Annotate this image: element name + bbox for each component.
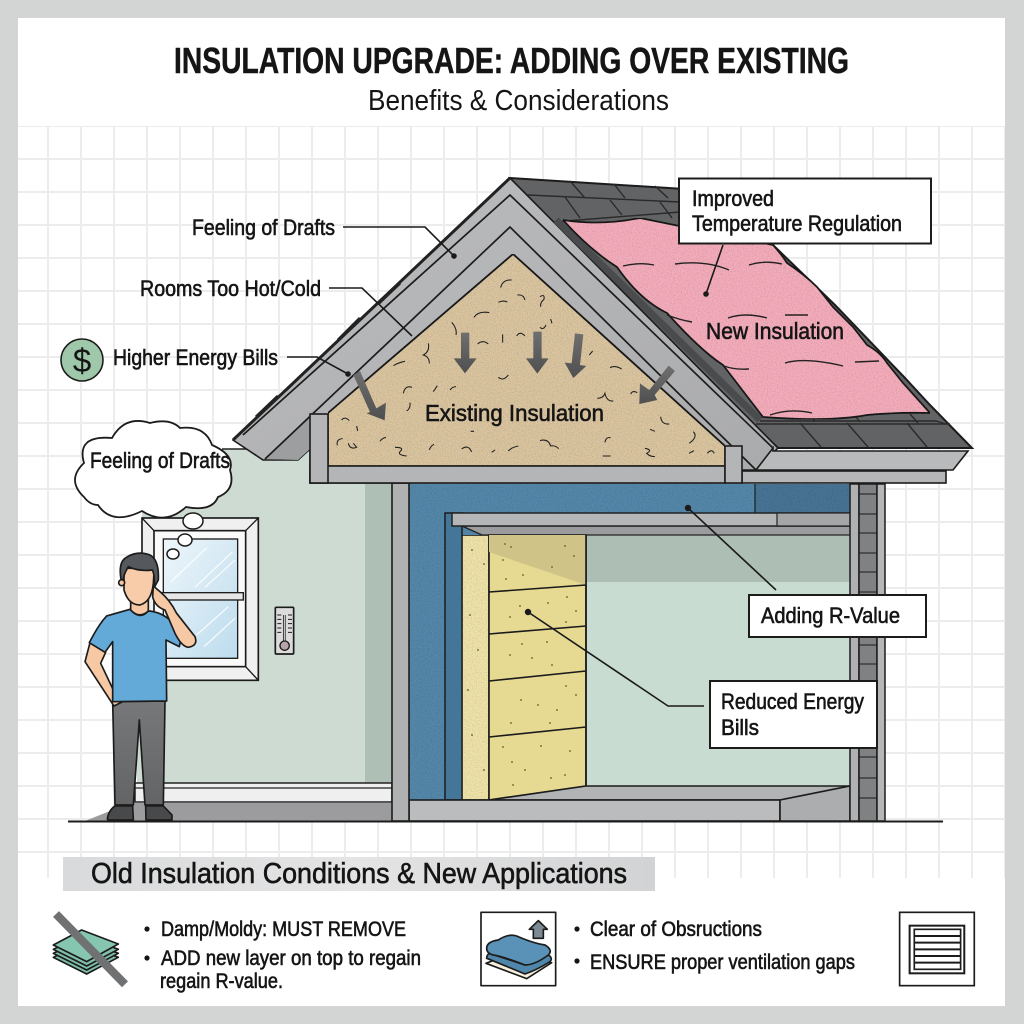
text: new application bullets bbox=[574, 918, 855, 974]
leader line: reduced energy bills bbox=[526, 610, 704, 706]
text: old insulation bullets: regain R-value. bbox=[160, 970, 283, 993]
label: existing insulation: Existing Insulation bbox=[425, 400, 604, 426]
wall cavity: blue sheathing bbox=[408, 484, 850, 800]
icon: dollar coin: $ bbox=[73, 342, 91, 379]
raised arm bbox=[153, 586, 196, 647]
callout: reduced energy bills bbox=[710, 681, 877, 748]
right roof shingles bbox=[510, 178, 972, 448]
roof rafters and gable bbox=[233, 178, 968, 483]
existing insulation attic fill bbox=[328, 254, 725, 466]
leader line: improved temperature bbox=[704, 245, 723, 296]
callout: reduced energy bills: Bills bbox=[721, 715, 759, 740]
person bbox=[85, 553, 196, 820]
legs bbox=[113, 701, 165, 805]
icon: layered new insulation bbox=[481, 912, 556, 986]
callout: improved temperature regulation: Improved bbox=[692, 186, 774, 211]
text: new application bullets: ENSURE proper ventilation gaps bbox=[590, 951, 855, 974]
callout: adding r-value bbox=[749, 595, 926, 637]
shoes bbox=[107, 806, 172, 820]
left wall post bbox=[392, 483, 409, 821]
brick column bbox=[850, 484, 885, 821]
leader line: higher energy bills bbox=[287, 357, 350, 376]
subtitle: Benefits & Considerations bbox=[368, 85, 669, 117]
ground line bbox=[68, 820, 943, 822]
baseboard and floor bbox=[85, 783, 392, 821]
floor slab bbox=[409, 786, 850, 821]
callout: improved temperature regulation bbox=[679, 178, 931, 244]
label: cloud text: Feeling of Drafts bbox=[90, 448, 230, 473]
icon: ventilation grille bbox=[900, 912, 974, 986]
interior room bbox=[586, 534, 850, 786]
label: new insulation: New Insulation bbox=[706, 318, 844, 344]
icon: dollar coin bbox=[61, 339, 103, 381]
roof ridge rail bbox=[556, 220, 760, 420]
callout: improved temperature regulation: Temperature Regulation bbox=[692, 211, 902, 236]
header beam bbox=[452, 513, 858, 535]
left arm bbox=[85, 643, 123, 706]
room wall bbox=[137, 449, 392, 783]
icon: crossed-out damp insulation bbox=[53, 914, 125, 984]
label: feeling of drafts: Feeling of Drafts bbox=[192, 215, 335, 240]
shirt bbox=[89, 609, 181, 702]
house illustration bbox=[68, 178, 972, 822]
text: old insulation bullets: Damp/Moldy: MUST REMOVE bbox=[161, 918, 406, 941]
callout: adding r-value: Adding R-Value bbox=[761, 603, 900, 628]
text: old insulation bullets: ADD new layer on top to regain bbox=[161, 947, 421, 970]
pink new insulation bbox=[563, 218, 930, 419]
leader line: feeling of drafts bbox=[343, 227, 456, 258]
thought cloud bbox=[75, 421, 232, 559]
window bbox=[142, 518, 258, 680]
leader line: adding r-value bbox=[686, 506, 776, 590]
label: higher energy bills: Higher Energy Bills bbox=[113, 345, 278, 370]
batt wrinkles bbox=[623, 262, 879, 415]
leader line: rooms too hot/cold bbox=[329, 288, 412, 336]
callout: reduced energy bills: Reduced Energy bbox=[721, 689, 864, 714]
text: new application bullets: Clear of Obsructions bbox=[590, 918, 762, 941]
neck and face bbox=[131, 598, 148, 615]
thermometer bbox=[275, 607, 294, 654]
attic heat-loss arrows bbox=[353, 332, 675, 420]
hair bbox=[120, 553, 158, 587]
loose-fill curls bbox=[337, 280, 714, 457]
yellow batt insulation bbox=[462, 535, 586, 800]
label: rooms too hot/cold: Rooms Too Hot/Cold bbox=[140, 276, 321, 301]
title: INSULATION UPGRADE: ADDING OVER EXISTING bbox=[174, 40, 849, 81]
section heading band: Old Insulation Conditions & New Applications bbox=[91, 858, 627, 890]
text: old insulation bullets bbox=[144, 918, 421, 993]
